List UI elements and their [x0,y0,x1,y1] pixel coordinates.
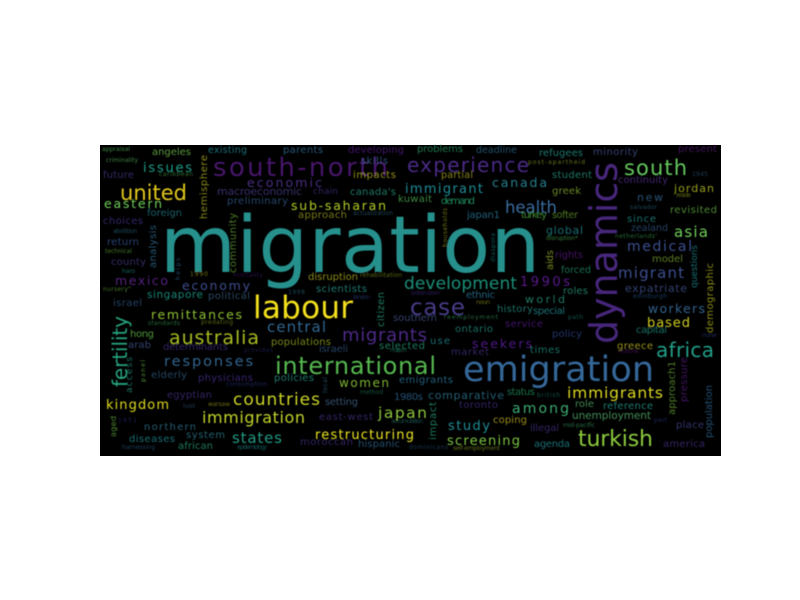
group: small words: predating [201,319,233,326]
group: medium words: foreign [147,208,182,219]
group: medium words: existing [208,145,247,156]
group: medium words: minority [593,147,638,158]
word: seekers: seekers [472,336,532,351]
word: fertility: fertility [108,316,132,387]
group: vertical words: aged [109,416,118,437]
group: medium words: selected [379,341,425,352]
group: medium words [103,144,717,452]
group: small words: post-apartheid [528,159,585,166]
group: small words: haro [122,268,135,275]
group: small words: 1990 [190,271,208,278]
group: vertical words: panel [140,360,147,382]
group: medium words: present [678,144,717,155]
group: vertical words: approach1 [667,361,678,415]
group: medium words: egyptian [167,390,212,401]
group: medium words: chain [313,187,338,197]
group: medium words: singapore [147,289,203,301]
group: small words: epidemiology [237,444,267,451]
group: medium words: refugees [539,148,583,159]
group: medium words: east-west [319,412,373,423]
group: vertical words: diaspora [490,233,497,262]
group: medium words: southern [393,313,437,324]
word: among: among [512,401,569,417]
group: vertical words: households [442,208,449,247]
group: medium words: policies [274,373,314,384]
group: small words: provides [244,347,273,354]
group: medium words: populations [271,337,331,348]
group: small words: mid-pacific [563,422,595,429]
group: small words: part [654,417,668,424]
group: small words: reemployment [444,314,499,321]
group: medium words: approach [298,210,347,221]
group: medium words: deadline [476,145,517,156]
group: small words: british-born [411,290,440,297]
word: labour: labour [253,290,353,326]
group: small words: dominicans [409,444,448,451]
group: small words: self-employment [453,445,501,452]
group: medium words: hong [130,329,154,340]
group: medium words: toronto [459,400,498,411]
group: vertical words: population [704,385,715,438]
group: vertical words: pressure [679,357,690,402]
group: small words: accumulation [391,418,423,425]
group: medium words: turkey [521,210,547,221]
group: small words: consumption [226,381,267,388]
word: emigration: emigration [463,350,654,390]
word: states: states [232,429,282,447]
group: vertical words: hemisphere [199,155,210,219]
group: medium words: preliminary [227,196,288,207]
group: medium words: jordan [673,182,714,195]
group: medium words: student [552,170,592,181]
group: vertical words: demographic [705,263,716,333]
word: medical: medical [627,239,692,255]
group: medium words: service [505,319,543,330]
group: small words: salvador [630,204,658,211]
group: small words: british [537,392,560,399]
word: central: central [267,318,326,336]
group: small words: netherlands' [615,233,657,240]
word: responses: responses [164,354,253,370]
group: medium words: african [178,441,213,452]
group: medium words: greece [617,341,653,352]
group: medium words: diseases [129,434,175,445]
word: immigrants: immigrants [567,384,663,402]
group: small words: mortality [233,272,263,279]
group: medium words: market [451,347,489,358]
word: dynamics: dynamics [582,162,626,344]
group: medium words: ethnic [466,290,495,301]
group: small words: disruption* [546,235,578,242]
word: migrant: migrant [618,264,684,282]
group: small words: tension [353,294,370,301]
group: small words: method [360,389,383,396]
group: small words: outlook [619,348,640,355]
group: medium words: times [530,345,560,356]
word: africa: africa [656,338,714,362]
group: small words: reside [676,192,691,199]
group: medium words: parents [283,145,323,156]
word: kingdom: kingdom [106,398,169,413]
word: migration: migration [160,201,540,291]
word: turkish: turkish [578,427,653,452]
group: medium words: elderly [151,370,187,381]
group: small words: edinburgh [633,293,667,300]
group: medium words: america [663,439,705,450]
word: south-north: south-north [213,153,388,183]
group: medium words: moroccan [300,437,353,448]
word: asia: asia [674,223,708,241]
group: medium words: angeles [152,147,191,158]
group: medium words: 1980s [394,392,423,403]
group: medium words: softer [552,210,578,221]
group: medium words: hispanic [358,439,400,450]
group: medium words: comparative [428,389,504,402]
group: medium words: determinants [163,342,228,353]
group: small words: 1945 [692,171,708,178]
word: 1990s: 1990s [520,275,570,290]
group: medium words: continuity [618,175,668,186]
group: medium words: rights [555,250,583,261]
group: medium words: disruption [308,272,358,283]
word: experience: experience [407,153,529,177]
word: remittances: remittances [151,307,242,322]
word: south: south [624,156,687,180]
word: restructuring: restructuring [315,428,414,443]
group: small words: rehabilitation [360,272,402,279]
word: sub-saharan: sub-saharan [291,198,386,213]
group: vertical words [109,155,716,440]
group: medium words: reference [603,401,653,412]
word: women: women [339,376,389,390]
group: small words: nurse [702,332,717,339]
group: medium words: revisited [670,205,717,216]
word: immigration: immigration [202,408,305,427]
word: countries: countries [233,390,320,410]
group: medium words: role [575,399,594,410]
word: development: development [404,274,517,294]
group: medium words: kuwait [398,194,432,205]
group: medium words: israel [113,298,142,309]
word: study: study [448,419,490,434]
word: screening: screening [447,434,520,449]
group: small words: caribbean [159,171,193,178]
word: international: international [275,352,436,380]
group: small words: path [568,314,583,321]
group: medium words: use [430,336,450,347]
group: small words: noun [476,299,490,306]
group: medium words: scientists [316,284,367,295]
group: vertical words: questions [690,245,700,288]
group: medium words: forced [561,265,591,276]
group: medium words: skills [361,156,388,167]
group: small words: museum [390,347,407,354]
group: small words: hold [183,403,195,410]
group: medium words: political [208,291,250,302]
group: vertical words: community [228,213,239,273]
word: united: united [120,181,187,205]
word: eastern: eastern [104,196,162,211]
group: medium words: future [103,170,134,181]
group: small words: nursery" [103,286,131,293]
group: medium words: capital [636,325,667,336]
group: medium words: since [627,214,656,225]
group: vertical words: aids [545,250,556,270]
group: medium words: system [186,430,225,441]
group: medium words: greek [552,186,581,197]
group: medium words: demand [441,196,475,207]
word: workers: workers [648,301,705,316]
word: economic: economic [247,175,322,190]
group: medium words: expatriate [625,282,687,295]
group: medium words: county [111,257,146,268]
word: migrants: migrants [342,325,427,346]
group: medium words: special [533,306,565,317]
group: vertical words: access [125,357,135,393]
group: medium words: setting [325,397,358,408]
group: medium words: partial [441,170,473,181]
group: small words: criminality [106,157,138,164]
group: medium words: northern [144,422,196,433]
group: medium words: roles [563,286,588,297]
group: small words: technical [105,248,132,255]
group: medium words: coping [493,415,527,426]
group: small words: warsaw [208,401,230,408]
group: medium words: choices [103,216,143,227]
group: medium words: world [525,293,565,306]
group: medium words: agenda [534,439,570,450]
group: medium words: model [652,254,683,265]
group: small words: 1998 [288,289,305,296]
group: medium words: return [107,237,139,248]
group: medium words: emigrants [399,375,453,386]
group: medium words: impacts [353,170,396,181]
group: medium words: problems [417,144,463,155]
word: issues: issues [143,161,192,176]
group: vertical words: citizen [376,292,387,327]
group: medium words: macroeconomic [217,185,302,198]
group: vertical words: helps [175,258,182,280]
group: medium words: israeli [319,344,348,355]
group: medium words: physicians [198,373,253,384]
group: vertical words: local [322,377,329,393]
word: case: case [410,295,465,321]
group: small words: harnessing [122,444,155,451]
group: medium words: arab [128,340,151,351]
group: medium words: place [676,420,704,431]
group: medium words: global [546,224,583,237]
panel background [100,145,721,456]
group: medium words: history [497,304,533,315]
group: small words: standards [148,320,180,327]
group: medium words: status [507,387,535,398]
group: medium words: japan1 [466,210,500,221]
word: immigrant: immigrant [405,182,483,197]
group: medium words: policy [552,329,582,340]
words [102,144,717,452]
word: health: health [505,198,557,217]
group: vertical words: analysis [148,225,159,268]
group: small words: appraisal [102,146,130,153]
group: small words: abolition [113,228,137,235]
word: mexico: mexico [115,273,168,288]
group: medium words: zealand [631,223,668,234]
group: medium words: new [637,191,663,204]
group: medium words: illegal [530,423,559,434]
group: small words [102,146,717,452]
group: medium words: developing [348,145,404,156]
group: small words: 1951 [118,417,137,424]
group: medium words: ontario [455,324,493,335]
group: medium words: unemployment [572,410,651,422]
word: japan: japan [377,404,427,422]
group: vertical words: impact [428,402,439,440]
word: canada: canada [492,175,547,190]
word: economy: economy [182,278,251,293]
word: australia: australia [169,327,259,349]
group: small words: actualization [353,210,393,217]
group: medium words: canada's [350,187,396,198]
word: based: based [647,316,690,331]
